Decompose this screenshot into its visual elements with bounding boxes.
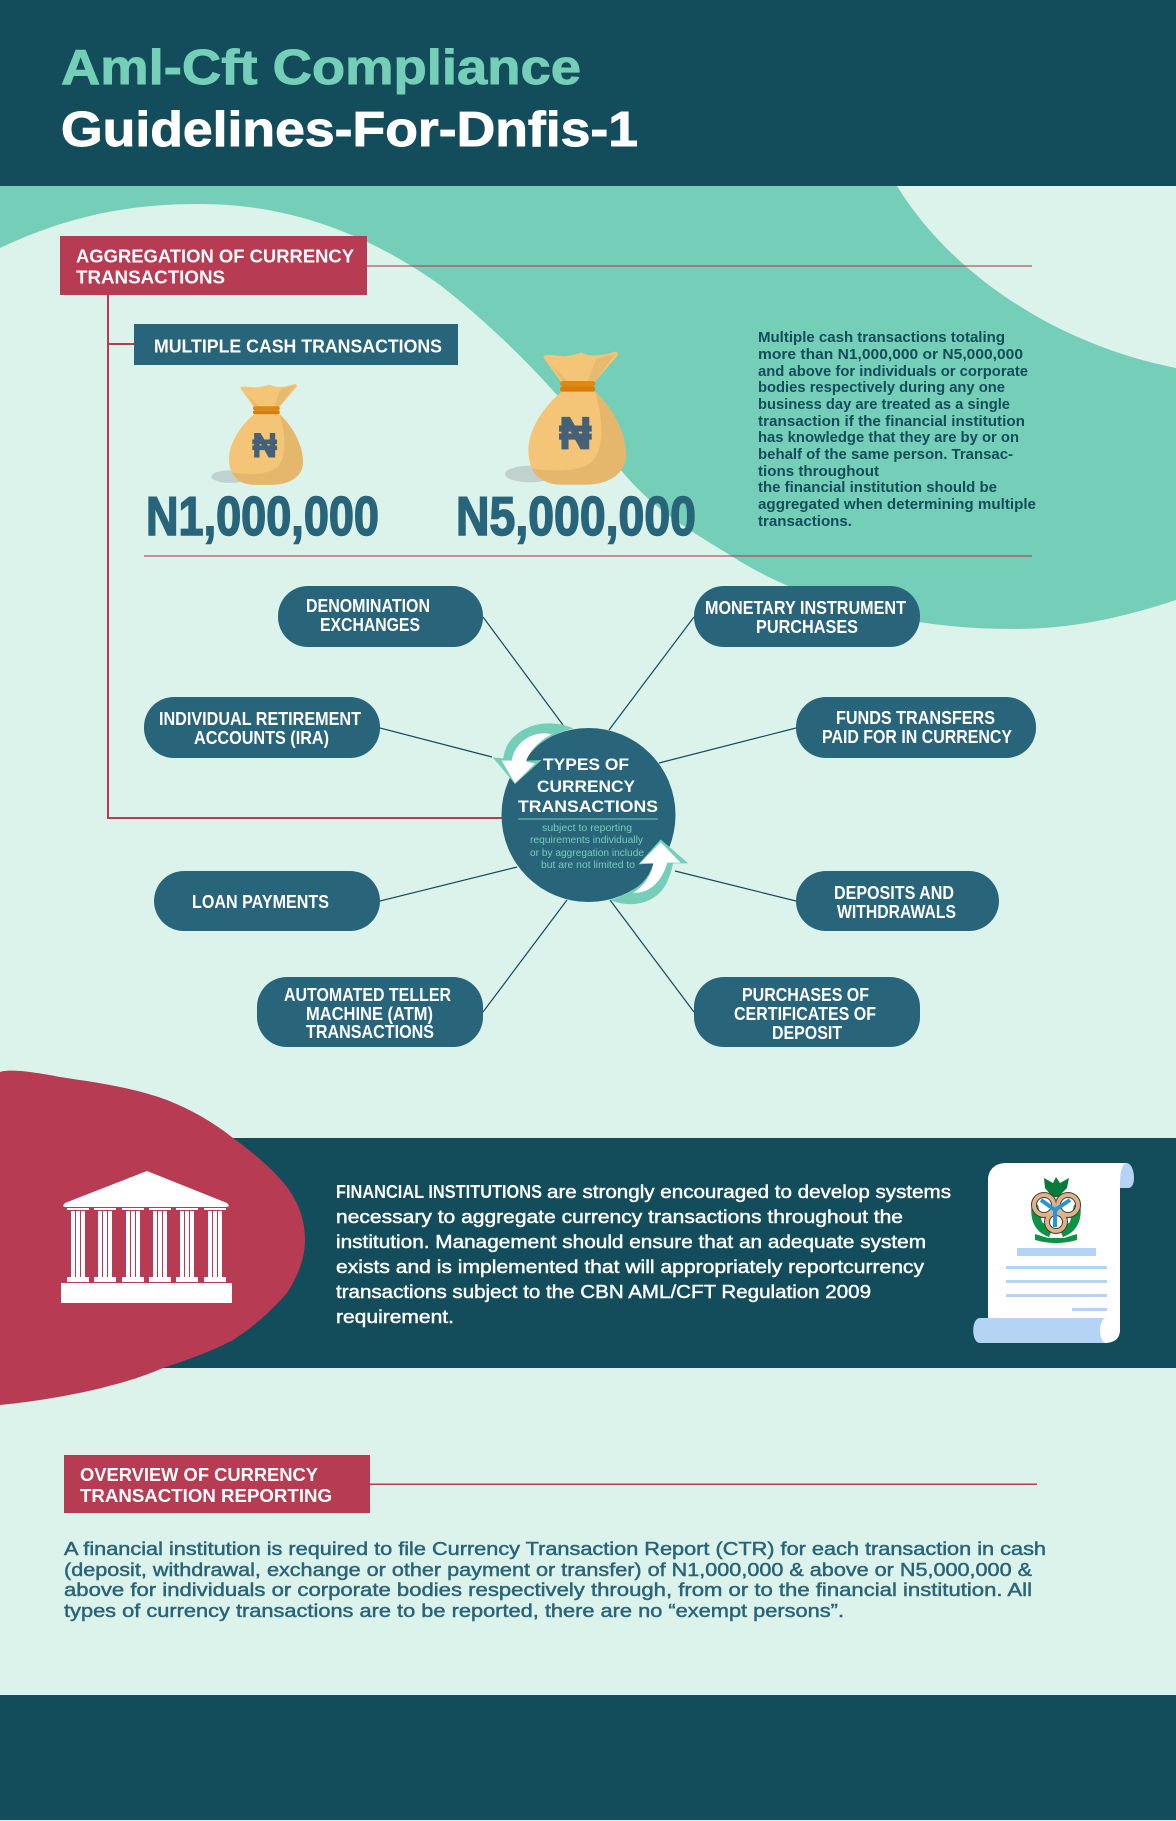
text block: multiple cash description: aggregated when determining multiple bbox=[758, 497, 1036, 513]
section heading: aggregation: AGGREGATION OF CURRENCY bbox=[76, 246, 354, 266]
central circle: types of currency transactions: CURRENCY bbox=[537, 777, 636, 796]
central circle: types of currency transactions: or by aggregation include bbox=[530, 847, 644, 859]
text block: multiple cash description: bodies respectively during any one bbox=[758, 380, 1005, 396]
title line 2: Guidelines-For-Dnfis-1 bbox=[61, 103, 638, 157]
pill: individual retirement accounts: INDIVIDUAL RETIREMENT bbox=[159, 709, 361, 729]
central circle: types of currency transactions: subject to reporting bbox=[542, 822, 632, 834]
text block: financial institutions: transactions subject to the CBN AML/CFT Regulation 2009 bbox=[336, 1282, 871, 1302]
text block: multiple cash description: the financial institution should be bbox=[758, 480, 997, 496]
pill: deposits and withdrawals: DEPOSITS AND bbox=[834, 883, 954, 903]
pill: automated teller machine: MACHINE (ATM) bbox=[306, 1004, 433, 1024]
crimson blob bbox=[0, 1071, 305, 1405]
pill: funds transfers: FUNDS TRANSFERS bbox=[836, 708, 995, 728]
text block: multiple cash description: tions throughout bbox=[758, 464, 879, 480]
icon: document scroll with emblem bbox=[973, 1163, 1134, 1343]
connector from heading to circle bbox=[108, 295, 502, 818]
text block: financial institutions: requirement. bbox=[336, 1307, 454, 1327]
text block: multiple cash description: transaction if the financial institution bbox=[758, 414, 1025, 430]
text block: multiple cash description: Multiple cash transactions totaling bbox=[758, 330, 1005, 346]
text block: overview paragraph bbox=[64, 1539, 1046, 1621]
pill: purchases of certificates of deposit bbox=[694, 977, 920, 1047]
icon: top-left circular arrow bbox=[493, 723, 573, 784]
connector lines bbox=[380, 617, 796, 1012]
pill: automated teller machine bbox=[257, 977, 483, 1047]
pill: monetary instrument purchases: MONETARY INSTRUMENT bbox=[705, 598, 906, 618]
text block: financial institutions: exists and is implemented that will appropriately reportcurrency bbox=[336, 1257, 924, 1277]
central circle: types of currency transactions: TYPES OF bbox=[543, 755, 629, 774]
icon: small money bag: ₦ bbox=[252, 427, 277, 465]
icon: small money bag bbox=[211, 384, 303, 485]
pill: funds transfers bbox=[796, 697, 1036, 758]
pill: loan payments bbox=[154, 871, 380, 931]
text block: multiple cash description: and above for individuals or corporate bbox=[758, 364, 1028, 380]
section heading: overview of currency transaction reporting: TRANSACTION REPORTING bbox=[80, 1486, 332, 1506]
pill: automated teller machine: AUTOMATED TELLER bbox=[284, 985, 451, 1005]
title line 1: Aml-Cft Compliance bbox=[61, 41, 581, 95]
text block: financial institutions: are strongly encouraged to develop systems bbox=[547, 1182, 951, 1202]
central circle: types of currency transactions: but are not limited to bbox=[541, 859, 635, 871]
icon: large money bag: ₦ bbox=[559, 407, 592, 458]
section heading: aggregation bbox=[60, 236, 367, 295]
text block: multiple cash description: has knowledge that they are by or on bbox=[758, 430, 1019, 446]
pill: funds transfers: PAID FOR IN CURRENCY bbox=[822, 727, 1012, 747]
subheading: multiple cash transactions bbox=[134, 324, 458, 365]
pill: denomination exchanges bbox=[278, 586, 483, 647]
emblem bbox=[1031, 1177, 1081, 1243]
text block: multiple cash description: more than N1,000,000 or N5,000,000 bbox=[758, 347, 1023, 363]
pill: deposits and withdrawals bbox=[796, 871, 999, 931]
central circle: types of currency transactions: TRANSACTIONS bbox=[518, 797, 658, 816]
text block: financial institutions bbox=[336, 1182, 951, 1327]
text block: financial institutions: FINANCIAL INSTITUTIONS bbox=[336, 1182, 542, 1202]
central circle: types of currency transactions bbox=[493, 723, 688, 904]
panel: financial institutions band bbox=[0, 1138, 1176, 1368]
icon: bottom-right circular arrow bbox=[610, 839, 688, 904]
text block: multiple cash description bbox=[758, 330, 1036, 530]
section heading: overview of currency transaction reporting bbox=[64, 1455, 370, 1513]
central circle: types of currency transactions: requirements individually bbox=[530, 834, 644, 846]
text block: overview paragraph: A financial institution is required to file Currency Transaction Report (CTR) for each transaction in cash bbox=[64, 1539, 1046, 1559]
header banner bbox=[0, 0, 1176, 186]
text block: overview paragraph: (deposit, withdrawal, exchange or other payment or transfer) of N1,000,000 & above or N5,000,000 & bbox=[64, 1560, 1032, 1580]
footer band bbox=[0, 1695, 1176, 1820]
pill: purchases of certificates of deposit: PURCHASES OF bbox=[742, 985, 869, 1005]
pill: monetary instrument purchases: PURCHASES bbox=[756, 617, 858, 637]
pill: denomination exchanges: EXCHANGES bbox=[320, 615, 420, 635]
icon: bank building bbox=[61, 1171, 232, 1303]
text block: multiple cash description: business day are treated as a single bbox=[758, 397, 1010, 413]
subheading: multiple cash transactions: MULTIPLE CASH TRANSACTIONS bbox=[154, 336, 442, 356]
text block: financial institutions: necessary to aggregate currency transactions throughout the bbox=[336, 1207, 903, 1227]
pill: denomination exchanges: DENOMINATION bbox=[306, 596, 430, 616]
text block: financial institutions: institution. Management should ensure that an adequate system bbox=[336, 1232, 926, 1252]
pill: purchases of certificates of deposit: CERTIFICATES OF bbox=[734, 1004, 876, 1024]
pill: loan payments: LOAN PAYMENTS bbox=[192, 892, 329, 912]
text block: multiple cash description: transactions. bbox=[758, 514, 852, 530]
section heading: overview of currency transaction reporting: OVERVIEW OF CURRENCY bbox=[80, 1465, 318, 1485]
pill: deposits and withdrawals: WITHDRAWALS bbox=[837, 902, 956, 922]
text block: overview paragraph: above for individuals or corporate bodies respectively through, from or to the financial institution. All bbox=[64, 1580, 1032, 1600]
pill: individual retirement accounts bbox=[144, 697, 380, 758]
amount: N5,000,000: N5,000,000 bbox=[456, 485, 696, 547]
text block: multiple cash description: behalf of the same person. Transac- bbox=[758, 447, 1013, 463]
section heading: aggregation: TRANSACTIONS bbox=[76, 268, 225, 288]
pill: monetary instrument purchases bbox=[694, 586, 920, 647]
pill: purchases of certificates of deposit: DEPOSIT bbox=[772, 1023, 842, 1043]
text block: overview paragraph: types of currency transactions are to be reported, there are no “exempt persons”. bbox=[64, 1601, 844, 1621]
icon: large money bag bbox=[505, 352, 626, 485]
pill: individual retirement accounts: ACCOUNTS (IRA) bbox=[194, 728, 329, 748]
amount: N1,000,000: N1,000,000 bbox=[146, 485, 379, 547]
pill: automated teller machine: TRANSACTIONS bbox=[306, 1022, 434, 1042]
